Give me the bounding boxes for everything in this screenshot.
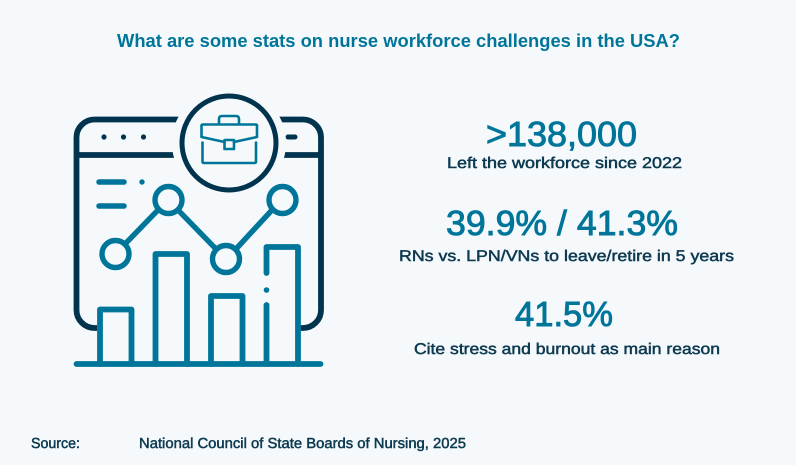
title: What are some stats on nurse workforce challenges in the USA?: [117, 30, 680, 51]
stat: intent to leave: [399, 204, 734, 265]
bar chart: [76, 247, 320, 364]
line chart: [102, 186, 296, 272]
stat: stress and burnout: [414, 295, 720, 358]
stat: stress and burnout: 41.5%: [515, 295, 613, 334]
icon: analytics browser window with briefcase: [76, 86, 321, 364]
stat: stress and burnout: Cite stress and burnout as main reason: [414, 341, 720, 358]
browser window frame: [76, 120, 321, 328]
stat: left workforce: [447, 115, 682, 172]
stat: left workforce: Left the workforce since 2022: [447, 155, 682, 172]
source note: National Council of State Boards of Nursing, 2025: [139, 436, 466, 452]
stat: intent to leave: RNs vs. LPN/VNs to leave/retire in 5 years: [399, 248, 734, 265]
stat: left workforce: >138,000: [486, 115, 637, 154]
briefcase badge: [172, 86, 286, 200]
text lines and dot: [99, 179, 145, 206]
source note: Source:: [31, 436, 80, 452]
stat: intent to leave: 39.9% / 41.3%: [446, 204, 678, 243]
